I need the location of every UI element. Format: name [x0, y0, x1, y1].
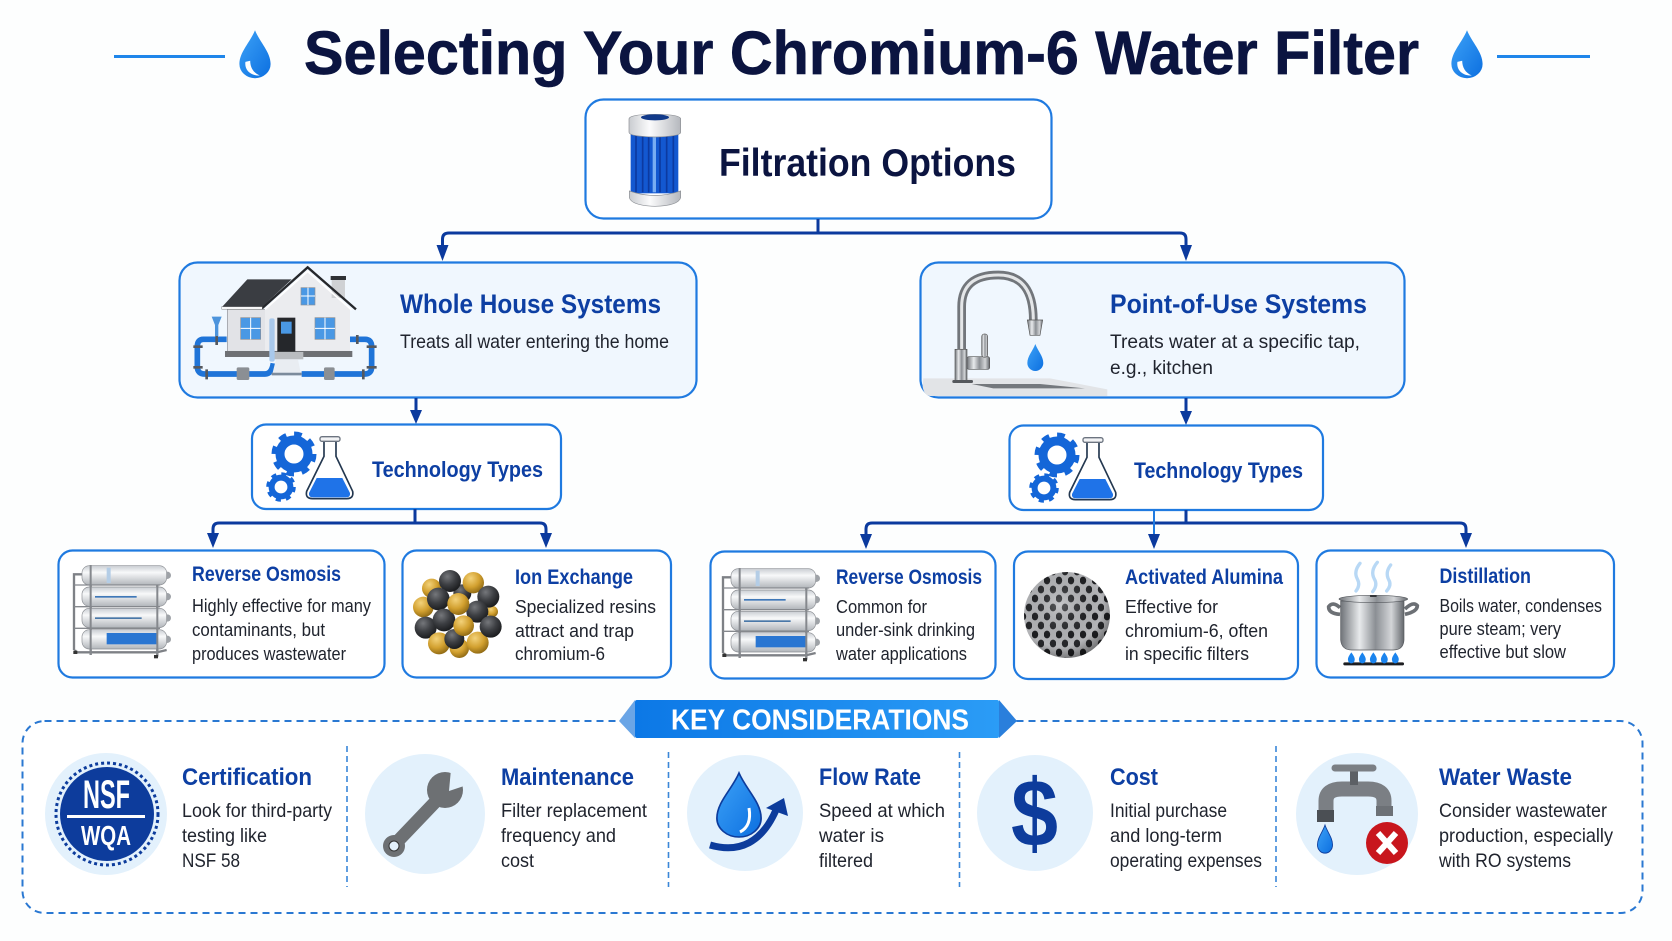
heading: filtration options: Filtration Options	[719, 142, 1016, 185]
text: cost description: operating expenses	[1110, 850, 1262, 872]
text: water waste description: production, especially	[1439, 825, 1613, 847]
heading: certification: Certification	[182, 764, 312, 791]
text: flow rate description: filtered	[819, 850, 873, 872]
text: distillation description: pure steam; very	[1440, 619, 1561, 639]
text: reverse osmosis description: water applications	[835, 643, 967, 664]
heading: activated alumina: Activated Alumina	[1125, 566, 1283, 589]
text: activated alumina description: chromium-6, often	[1125, 620, 1268, 641]
text: distillation description	[1440, 596, 1602, 662]
heading: reverse osmosis: Reverse Osmosis	[836, 566, 982, 589]
text: whole house description: Treats all water entering the home	[400, 331, 669, 353]
icon: gears and flask left	[268, 434, 353, 500]
text: certification description: NSF 58	[182, 850, 240, 872]
heading: flow rate: Flow Rate	[819, 764, 921, 791]
heading: reverse osmosis: Reverse Osmosis	[192, 563, 341, 586]
text: ion exchange description: chromium-6	[515, 643, 605, 664]
icon: filter cartridge	[629, 114, 681, 206]
text: point-of-use description: Treats water at a specific tap,	[1110, 331, 1360, 353]
heading: point-of-use systems: Point-of-Use Systems	[1110, 289, 1367, 319]
icon: tap with drop and red cross	[1296, 753, 1418, 875]
panel: point-of-use systems	[920, 262, 1404, 398]
panel: distillation	[1316, 550, 1614, 678]
title	[114, 19, 1590, 87]
icon: gears and flask right	[1031, 435, 1116, 501]
panel: filtration options	[586, 100, 1052, 218]
text: flow rate description: Speed at which	[819, 800, 945, 822]
text: cost description: Initial purchase	[1110, 800, 1227, 822]
heading: technology types left: Technology Types	[372, 457, 543, 482]
icon: kitchen faucet and sink	[923, 275, 1107, 396]
banner: key considerations: KEY CONSIDERATIONS	[671, 704, 969, 736]
arrow: point-of-use to technology types	[1180, 398, 1192, 425]
text: point-of-use description: e.g., kitchen	[1110, 357, 1213, 379]
icon: NSF WQA seal: WQA	[81, 820, 131, 851]
icon: NSF WQA seal	[45, 753, 167, 875]
text: flow rate description: water is	[818, 825, 884, 847]
panel: technology types left	[252, 424, 561, 509]
icon: title drop left	[239, 30, 271, 78]
text: distillation description: effective but slow	[1440, 642, 1567, 662]
heading: ion exchange: Ion Exchange	[515, 566, 633, 589]
icon: boiling pot with steam	[1329, 562, 1417, 665]
title rule right	[1497, 55, 1590, 58]
arrow: right technology branches	[860, 510, 1472, 549]
text: reverse osmosis description: produces wastewater	[192, 643, 346, 664]
heading: distillation: Distillation	[1440, 565, 1531, 588]
heading: water waste: Water Waste	[1439, 764, 1572, 791]
item: flow rate	[687, 755, 945, 872]
text: certification description: Look for third-party	[182, 800, 332, 822]
banner: key considerations	[619, 700, 1017, 738]
text: cost description	[1110, 800, 1262, 872]
heading: whole house systems: Whole House Systems	[400, 289, 661, 319]
icon: water drop with arrow	[687, 755, 803, 871]
text: distillation description: Boils water, condenses	[1440, 596, 1602, 616]
heading: maintenance: Maintenance	[501, 764, 634, 791]
icon: dollar sign: $	[1011, 760, 1058, 867]
title heading: Selecting Your Chromium-6 Water Filter	[304, 19, 1419, 87]
text: cost description: and long-term	[1110, 825, 1222, 847]
text: flow rate description	[818, 800, 945, 872]
text: maintenance description: Filter replacement	[501, 800, 648, 822]
panel: key considerations	[22, 700, 1642, 913]
text: point-of-use description	[1110, 331, 1360, 379]
text: water waste description: with RO systems	[1438, 850, 1571, 872]
text: reverse osmosis description: under-sink drinking	[836, 619, 975, 640]
item: water waste	[1296, 753, 1613, 875]
text: maintenance description: frequency and	[501, 825, 616, 847]
text: water waste description: Consider wastewater	[1439, 800, 1607, 822]
panel: reverse osmosis (point of use)	[710, 552, 996, 678]
text: reverse osmosis description	[192, 595, 372, 664]
panel: reverse osmosis (whole house)	[58, 550, 384, 678]
icon: title drop right	[1451, 30, 1483, 78]
panel: ion exchange	[402, 550, 671, 678]
text: reverse osmosis description: Highly effective for many	[192, 595, 372, 616]
text: activated alumina description: in specific filters	[1125, 643, 1249, 664]
text: certification description	[182, 800, 332, 872]
icon: NSF WQA seal: NSF	[83, 773, 130, 817]
text: activated alumina description	[1125, 596, 1268, 664]
panel: technology types right	[1010, 426, 1323, 510]
text: reverse osmosis description: Common for	[836, 596, 927, 617]
panel: activated alumina	[1014, 552, 1298, 679]
arrow: left technology branches	[207, 509, 552, 548]
text: reverse osmosis description	[835, 596, 975, 664]
icon: resin beads	[413, 570, 502, 658]
text: maintenance description	[501, 800, 648, 872]
text: reverse osmosis description: contaminants, but	[192, 619, 325, 640]
text: ion exchange description: Specialized resins	[515, 596, 656, 617]
text: ion exchange description: attract and trap	[515, 620, 634, 641]
icon: reverse osmosis rack	[73, 565, 171, 658]
icon: house with pipes	[193, 267, 377, 380]
icon: dollar sign	[977, 755, 1093, 871]
panel: whole house systems	[180, 262, 696, 398]
text: water waste description	[1438, 800, 1613, 872]
icon: reverse osmosis rack	[722, 568, 820, 661]
icon: porous alumina sphere	[1024, 572, 1110, 658]
heading: technology types right: Technology Types	[1134, 458, 1303, 483]
heading: cost: Cost	[1110, 764, 1158, 791]
icon: wrench	[365, 754, 485, 874]
text: certification description: testing like	[182, 825, 267, 847]
title rule left	[114, 55, 225, 58]
text: activated alumina description: Effective for	[1125, 596, 1218, 617]
item: certification	[45, 753, 332, 875]
arrow: filtration options to system branches	[436, 219, 1192, 261]
text: ion exchange description	[515, 596, 656, 664]
item: cost	[977, 755, 1262, 872]
arrow: whole house to technology types	[410, 398, 422, 424]
text: maintenance description: cost	[501, 850, 535, 872]
item: maintenance	[365, 754, 648, 874]
